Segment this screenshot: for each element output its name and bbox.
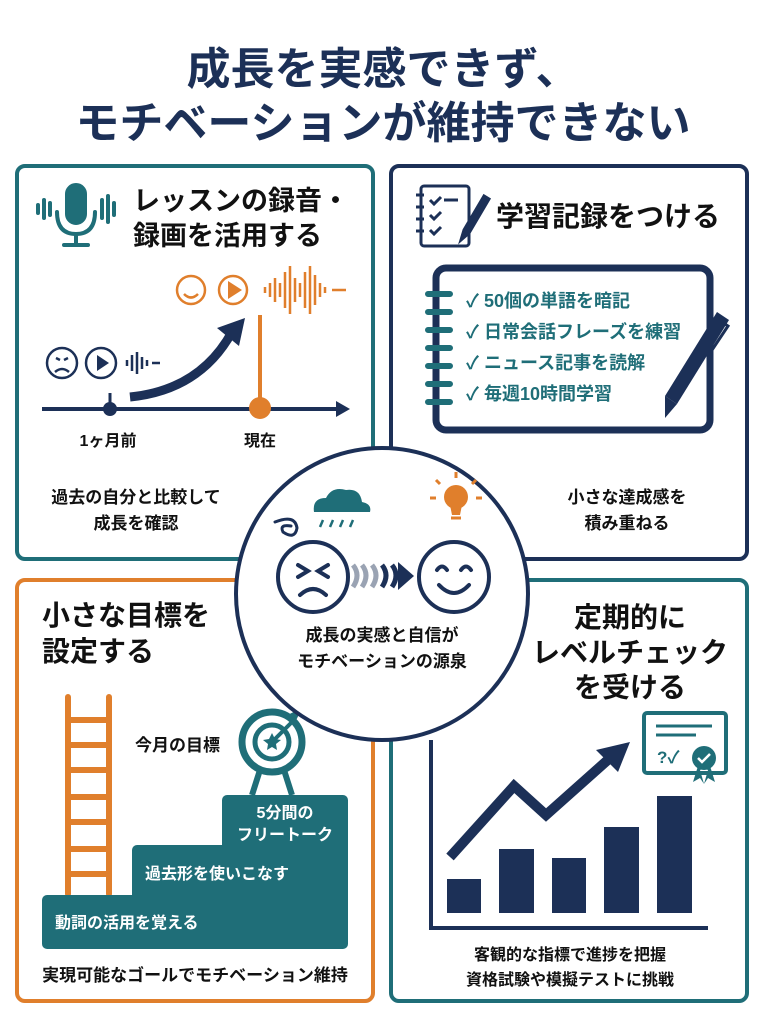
icon: happy face — [419, 542, 489, 612]
heading: 定期的に — [574, 602, 686, 633]
timeline chart — [42, 266, 350, 450]
heading: 録画を活用する — [133, 221, 322, 251]
caption: 資格試験や模擬テストに挑戦 — [466, 970, 674, 989]
bar chart — [431, 740, 708, 928]
panel: small goals: 今月の目標 — [135, 735, 220, 755]
icon: light bulb — [430, 472, 482, 518]
center text — [297, 625, 467, 671]
caption: 客観的な指標で進捗を把握 — [474, 945, 666, 964]
notebook: ✓ 日常会話フレーズを練習 — [466, 321, 681, 342]
title — [75, 45, 691, 148]
notebook: ✓ ニュース記事を読解 — [466, 353, 645, 373]
panel: small goals: 動詞の活用を覚える — [55, 913, 199, 932]
center text: モチベーションの源泉 — [297, 651, 467, 671]
heading: 小さな目標を — [42, 600, 210, 631]
steps — [42, 795, 348, 949]
center circle — [236, 448, 528, 740]
ladder — [68, 697, 109, 894]
caption: 過去の自分と比較して — [51, 487, 221, 507]
caption: 積み重ねる — [584, 514, 670, 533]
caption — [51, 487, 221, 533]
notebook — [428, 268, 729, 430]
panel: small goals: 過去形を使いこなす — [145, 864, 289, 883]
caption — [466, 945, 674, 989]
title: 成長を実感できず、 — [187, 45, 579, 94]
heading: レベルチェック — [532, 637, 728, 668]
heading: を受ける — [574, 672, 686, 703]
icon: rain cloud — [314, 489, 370, 527]
heading — [42, 600, 210, 667]
caption — [568, 487, 686, 533]
panel: small goals — [17, 580, 373, 1001]
notebook: ✓ 50個の単語を暗記 — [466, 290, 630, 311]
caption: 成長を確認 — [94, 513, 178, 533]
title: モチベーションが維持できない — [75, 99, 691, 148]
panel: level check — [391, 580, 747, 1001]
arrow: chevrons — [353, 562, 414, 590]
icon: pen — [665, 312, 729, 418]
heading — [532, 602, 728, 703]
heading: 設定する — [42, 636, 154, 667]
icon: sad face — [275, 519, 348, 612]
panel: small goals: フリートーク — [237, 826, 333, 844]
icon: microphone — [38, 185, 114, 245]
caption: 小さな達成感を — [568, 487, 686, 507]
icon: target — [242, 712, 302, 795]
timeline chart: 現在 — [244, 431, 276, 450]
icon: certificate: ?✓ — [657, 748, 680, 767]
heading — [133, 186, 349, 251]
icon: certificate — [644, 713, 726, 784]
timeline chart: 1ヶ月前 — [80, 431, 136, 450]
heading: レッスンの録音・ — [133, 186, 349, 216]
caption: 実現可能なゴールでモチベーション維持 — [42, 965, 348, 985]
panel: learning log — [391, 166, 747, 559]
panel: small goals: 5分間の — [257, 804, 313, 822]
heading: 学習記録をつける — [496, 201, 720, 232]
icon: checklist — [416, 186, 489, 246]
notebook: ✓ 毎週10時間学習 — [466, 383, 612, 404]
panel: recording — [17, 166, 373, 559]
center text: 成長の実感と自信が — [306, 625, 458, 645]
